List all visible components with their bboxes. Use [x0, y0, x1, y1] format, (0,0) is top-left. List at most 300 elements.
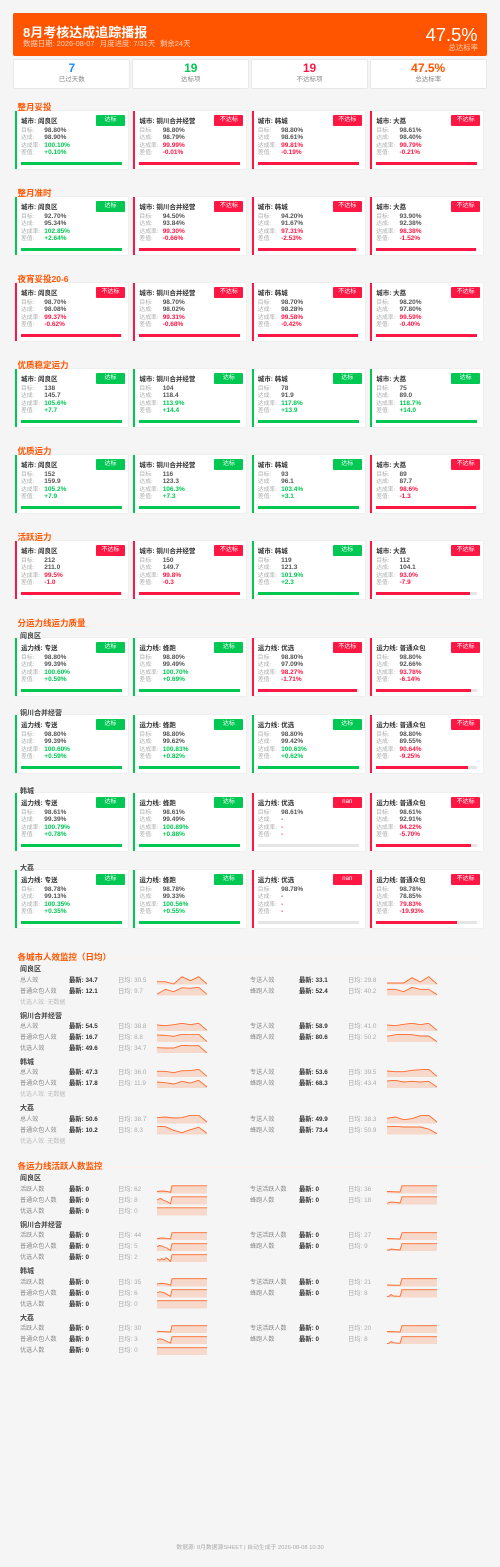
metrics: 差值:	[139, 150, 153, 156]
row: 专送活跃人数	[250, 1231, 440, 1241]
card title: 城市: 大荔	[376, 290, 406, 296]
status badge	[214, 201, 243, 212]
metrics: 101.9%	[281, 572, 303, 579]
subtitle: date and progress	[23, 38, 190, 48]
metrics: 达成率:	[376, 401, 395, 407]
group: 阎良区 人效	[0, 965, 500, 1008]
metrics: 差值:	[139, 677, 153, 683]
metrics: 目标:	[21, 887, 34, 893]
overall rate value: 47.5%	[426, 24, 478, 44]
status badge	[333, 797, 362, 808]
metrics: -0.01%	[163, 149, 183, 156]
metrics: 达成:	[21, 894, 34, 900]
metrics	[21, 213, 70, 242]
metrics	[258, 809, 303, 838]
metrics: 98.70%	[163, 299, 185, 306]
metrics: 98.40%	[399, 134, 422, 141]
metrics	[258, 385, 303, 414]
row: 蜂跑人效	[250, 1033, 440, 1043]
row: 活跃人数: 最新: 0	[69, 1279, 89, 1286]
metrics: 目标:	[258, 300, 271, 306]
KPI: overall rate: 总达标率	[415, 76, 441, 83]
metrics: 94.50%	[163, 213, 185, 220]
row: 总人效: 最新: 47.3	[69, 1069, 98, 1076]
status badge: 不达标	[101, 547, 120, 553]
status badge: 不达标	[457, 203, 475, 209]
status badge: 不达标	[338, 117, 356, 123]
card title: 城市: 大荔	[376, 462, 406, 468]
card: 铜川合并经营 优选	[251, 714, 366, 774]
metrics: -1.3	[399, 493, 411, 500]
card title: 运力线: 专送	[21, 876, 57, 884]
row: 总人效: 日均: 38.8	[118, 1023, 146, 1030]
metrics: 目标:	[376, 300, 389, 306]
metrics: 差值:	[258, 832, 271, 838]
metrics: 99.13%	[44, 893, 66, 900]
status badge: 不达标	[457, 461, 475, 467]
metrics: 98.80%	[281, 654, 303, 661]
metrics: 目标:	[376, 732, 389, 738]
row: 专送活跃人数: 日均: 36	[348, 1186, 371, 1193]
metrics: 差值:	[21, 322, 34, 328]
row: 专送人效	[250, 1068, 440, 1078]
metrics: 目标:	[139, 887, 153, 893]
metrics: 89.0	[399, 392, 412, 399]
metrics: 达成率:	[139, 487, 158, 493]
row: 普通众包人数: 最新: 0	[69, 1336, 89, 1343]
progress bar	[376, 506, 477, 508]
row: 总人效: 总人效	[20, 1116, 38, 1123]
row: 普通众包人数: 最新: 0	[69, 1197, 89, 1204]
group: 韩城 人效	[0, 1058, 500, 1101]
metrics	[376, 127, 422, 156]
row: 活跃人数	[20, 1231, 210, 1241]
row: 专送活跃人数	[250, 1278, 440, 1288]
metrics: 达成:	[21, 221, 34, 227]
status badge: 不达标	[457, 721, 475, 727]
metrics: 100.70%	[163, 669, 188, 676]
metrics: 目标:	[376, 214, 389, 220]
title: 8月考核达成追踪播报	[23, 24, 147, 40]
row: 普通众包人效	[20, 987, 210, 997]
metrics	[139, 731, 188, 760]
metrics: 98.61%	[44, 809, 66, 816]
row: 普通众包人数: 普通众包人数	[20, 1290, 57, 1297]
metrics: 达成率:	[376, 670, 395, 676]
metrics: 98.70%	[281, 299, 303, 306]
row: 普通众包人数	[20, 1289, 210, 1299]
card title: 城市: 阎良区	[21, 548, 57, 554]
metrics: 91.67%	[281, 220, 303, 227]
row: 普通众包人数: 普通众包人数	[20, 1197, 57, 1204]
metrics: 99.39%	[44, 661, 66, 668]
status badge	[451, 642, 480, 653]
metrics: +0.35%	[44, 908, 67, 915]
row: 蜂跑人数: 蜂跑人数	[250, 1290, 274, 1297]
status badge	[214, 373, 243, 384]
card: 整月妥投 阎良区	[14, 110, 129, 170]
metrics: 99.39%	[44, 738, 66, 745]
card: 大荔 优选	[251, 869, 366, 929]
metrics: 目标:	[21, 386, 34, 392]
row: 蜂跑人数: 日均: 9	[348, 1243, 368, 1250]
metrics: 差值:	[139, 580, 153, 586]
card: 整月准时 大荔	[369, 196, 484, 256]
row: 专送人效: 最新: 33.1	[299, 977, 328, 984]
subheading: 阎良区	[20, 1175, 41, 1182]
card: 活跃运力 大荔	[369, 540, 484, 600]
row: 蜂跑人数: 日均: 18	[348, 1197, 371, 1204]
metrics	[21, 809, 70, 838]
row: 活跃人数	[20, 1278, 210, 1288]
progress bar	[139, 689, 240, 692]
subheading: 大荔	[20, 1315, 34, 1322]
row: 普通众包人效: 普通众包人效	[20, 988, 57, 995]
metrics: +2.3	[281, 579, 294, 586]
metrics: 达成:	[376, 307, 389, 313]
metrics: 105.2%	[44, 486, 66, 493]
header banner	[13, 13, 487, 56]
group: 韩城 活跃人数	[0, 1267, 500, 1310]
metrics: 差值:	[376, 754, 389, 760]
status badge: 达标	[460, 375, 472, 381]
metrics	[139, 385, 184, 414]
row: 蜂跑人效: 蜂跑人效	[250, 1080, 274, 1087]
status badge	[96, 373, 125, 384]
subheading: 大荔	[20, 1105, 34, 1112]
card: 优质运力 韩城	[251, 454, 366, 514]
metrics: 达成:	[21, 307, 34, 313]
metrics: 达成:	[139, 739, 153, 745]
card: 铜川合并经营 普通众包	[369, 714, 484, 774]
metrics: 达成率:	[258, 902, 277, 908]
metrics: 98.61%	[399, 127, 422, 134]
metrics: 差值:	[376, 580, 389, 586]
metrics: -0.42%	[281, 321, 302, 328]
metrics: 差值:	[258, 909, 271, 915]
status badge	[214, 874, 243, 885]
metrics: 78.85%	[399, 893, 422, 900]
row: 普通众包人数	[20, 1242, 210, 1252]
metrics: 达成率:	[376, 229, 395, 235]
metrics: -2.53%	[281, 235, 302, 242]
status badge: 不达标	[101, 289, 120, 295]
subheading: 铜川合并经营	[20, 1013, 62, 1020]
status badge	[333, 874, 362, 885]
row: 蜂跑人效	[250, 987, 440, 997]
subheading: 韩城: 韩城	[20, 788, 34, 794]
metrics	[139, 809, 188, 838]
metrics: 98.61%	[281, 134, 303, 141]
card: 夜宵妥投 铜川合并经营	[132, 282, 247, 342]
metrics: -	[281, 901, 283, 908]
card: 优质运力 铜川合并经营	[132, 454, 247, 514]
overall rate label: 总达标率	[448, 43, 478, 52]
card: 韩城 普通众包	[369, 792, 484, 852]
row: 普通众包人效: 普通众包人效	[20, 1034, 57, 1041]
status badge	[333, 115, 362, 126]
row: 活跃人数: 最新: 0	[69, 1232, 89, 1239]
metrics: 达成:	[258, 221, 271, 227]
metrics: 99.81%	[281, 142, 303, 149]
metrics: 差值:	[376, 150, 389, 156]
metrics: 目标:	[376, 386, 389, 392]
metrics: 112	[399, 557, 410, 564]
row: 蜂跑人效: 蜂跑人效	[250, 1034, 274, 1041]
card title: 城市: 阎良区	[21, 204, 57, 210]
metrics: 95.34%	[44, 220, 66, 227]
metrics: -0.3	[163, 579, 174, 586]
progress bar	[139, 592, 240, 594]
metrics: 达成:	[139, 135, 153, 141]
metrics: 113.9%	[163, 400, 184, 407]
metrics: 98.80%	[399, 731, 422, 738]
row: 总人效: 最新: 34.7	[69, 977, 98, 984]
status badge: 达标	[341, 461, 353, 467]
heading: 夜宵妥投20-6: 夜宵妥投20-6	[18, 274, 69, 284]
KPI: elapsed days: 7	[68, 61, 75, 75]
row: 普通众包人数: 日均: 5	[118, 1243, 138, 1250]
metrics: -9.25%	[399, 753, 420, 760]
subheading: 阎良区	[20, 966, 41, 973]
metrics: 106.3%	[163, 486, 185, 493]
subtitle: date and progress: 剩余24天	[160, 38, 190, 48]
status badge: 达标	[104, 375, 116, 381]
status badge	[333, 287, 362, 298]
metrics: 达成:	[376, 135, 389, 141]
card: 活跃运力 阎良区	[14, 540, 129, 600]
metrics: 99.59%	[399, 314, 422, 321]
metrics: 93	[281, 471, 288, 478]
metrics: 达成:	[21, 479, 34, 485]
heading: 各运力线活跃人数监控: 各运力线活跃人数监控	[18, 1161, 103, 1171]
metrics: 达成率:	[21, 487, 40, 493]
row: 普通众包人效: 最新: 17.8	[69, 1080, 98, 1087]
progress bar	[258, 506, 359, 508]
card: 阎良区 普通众包	[369, 637, 484, 697]
metrics: 差值:	[376, 677, 389, 683]
status badge	[333, 373, 362, 384]
status badge	[214, 642, 243, 653]
card: 优质运力 阎良区	[14, 454, 129, 514]
metrics: 159.9	[44, 478, 61, 485]
card title: 城市: 韩城	[258, 118, 288, 124]
status badge: 达标	[104, 644, 116, 650]
metrics: -0.19%	[281, 149, 302, 156]
metrics: 目标:	[258, 214, 271, 220]
metrics: 达成率:	[376, 487, 395, 493]
row: 专送活跃人数: 日均: 27	[348, 1232, 371, 1239]
row: 优选人数: 最新: 0	[69, 1347, 89, 1354]
row: 蜂跑人数: 最新: 0	[299, 1336, 319, 1343]
row: 活跃人数: 活跃人数	[20, 1232, 44, 1239]
metrics: 98.61%	[399, 809, 422, 816]
row: 专送活跃人数: 专送活跃人数	[250, 1325, 287, 1332]
progress bar	[376, 248, 477, 250]
row: 专送人效	[250, 1022, 440, 1032]
progress bar	[139, 248, 240, 250]
progress bar	[376, 592, 477, 594]
progress bar	[21, 162, 122, 164]
metrics	[258, 471, 303, 500]
progress bar	[376, 334, 477, 336]
row: 蜂跑人效: 日均: 40.2	[348, 988, 376, 995]
card: 韩城 优选	[251, 792, 366, 852]
row: 优选人数: 最新: 0	[69, 1301, 89, 1308]
metrics: 达成:	[139, 565, 153, 571]
status badge: 达标	[223, 461, 235, 467]
metrics	[21, 299, 66, 328]
status badge	[96, 545, 125, 556]
card title: 城市: 韩城	[258, 548, 288, 554]
row: 专送人效: 专送人效	[250, 1069, 274, 1076]
progress bar	[258, 766, 359, 768]
row: 优选人效: 优选人效	[20, 1045, 44, 1052]
metrics: 94.22%	[399, 824, 422, 831]
metrics: 达成:	[376, 221, 389, 227]
card title: 运力线: 普通众包	[376, 800, 426, 806]
progress bar	[21, 334, 122, 336]
metrics: 98.27%	[281, 669, 303, 676]
metrics: 98.90%	[44, 134, 66, 141]
status badge: nan	[342, 876, 352, 882]
metrics: 98.80%	[44, 127, 66, 134]
heading: 整月妥投: 整月妥投	[18, 102, 52, 112]
metrics: +14.4	[163, 407, 179, 414]
status badge: 达标	[223, 876, 235, 882]
card title: 城市: 韩城	[258, 204, 288, 210]
progress bar	[139, 162, 240, 164]
status badge: 达标	[341, 721, 353, 727]
metrics: 达成率:	[376, 825, 395, 831]
metrics	[139, 299, 185, 328]
row: 优选人数: 优选人数	[20, 1254, 44, 1261]
metrics: +7.9	[44, 493, 57, 500]
metrics: 211.0	[44, 564, 60, 571]
row: 活跃人数	[20, 1324, 210, 1334]
heading: 优质稳定运力: 优质稳定运力	[18, 360, 69, 370]
metrics: 差值:	[21, 236, 34, 242]
metrics: 达成率:	[258, 825, 277, 831]
metrics: 差值:	[139, 832, 153, 838]
metrics: 差值:	[258, 150, 271, 156]
card title: 运力线: 普通众包	[376, 722, 426, 728]
heading: 整月准时: 整月准时	[18, 188, 52, 198]
group: 铜川合并经营 活跃人数	[0, 1221, 500, 1264]
KPI: failed	[251, 59, 368, 88]
row: 专送人效: 专送人效	[250, 1116, 274, 1123]
row: 活跃人数: 日均: 35	[118, 1279, 141, 1286]
metrics: 目标:	[139, 810, 153, 816]
metrics: 达成:	[376, 565, 389, 571]
metrics: 达成:	[139, 662, 153, 668]
row: 蜂跑人数: 日均: 8	[348, 1336, 368, 1343]
metrics	[376, 886, 466, 916]
metrics: 目标:	[21, 472, 34, 478]
metrics: 98.80%	[281, 731, 303, 738]
status badge: 不达标	[220, 547, 238, 553]
metrics: 达成:	[258, 565, 271, 571]
row: 普通众包人数: 日均: 3	[118, 1336, 138, 1343]
row: 优选人数	[20, 1300, 210, 1310]
metrics: 达成率:	[258, 670, 277, 676]
metrics: 达成率:	[139, 670, 158, 676]
status badge: nan	[342, 799, 352, 805]
metrics	[139, 471, 185, 500]
status badge: 达标	[341, 547, 353, 553]
metrics: 差值:	[139, 322, 153, 328]
row: 专送活跃人数: 最新: 0	[299, 1325, 319, 1332]
status badge: 不达标	[457, 644, 475, 650]
row: 普通众包人效: 日均: 8.3	[118, 1127, 143, 1134]
metrics	[376, 299, 422, 328]
metrics: 98.78%	[44, 886, 66, 893]
metrics: 117.8%	[281, 400, 303, 407]
metrics: 91.9	[281, 392, 294, 399]
metrics: 差值:	[376, 494, 389, 500]
card title: 运力线: 蜂跑	[139, 644, 176, 652]
metrics	[21, 557, 63, 586]
card title: 运力线: 普通众包	[376, 876, 426, 884]
metrics: 99.8%	[163, 572, 181, 579]
metrics: 97.31%	[281, 228, 303, 235]
row: 蜂跑人效: 日均: 43.4	[348, 1080, 376, 1087]
metrics: +0.69%	[163, 676, 185, 683]
metrics	[376, 809, 422, 838]
progress bar	[139, 921, 240, 924]
metrics	[21, 127, 70, 156]
status badge	[451, 459, 480, 470]
subheading: 阎良区: 阎良区	[20, 633, 41, 640]
KPI: overall rate	[370, 59, 487, 88]
row: 专送活跃人数: 专送活跃人数	[250, 1279, 287, 1286]
progress bar	[21, 844, 122, 846]
metrics: -0.66%	[163, 235, 183, 242]
metrics: 达成率:	[21, 825, 40, 831]
metrics: 达成:	[376, 662, 389, 668]
metrics	[376, 557, 418, 586]
progress bar	[258, 844, 359, 846]
group: 铜川合并经营 人效	[0, 1012, 500, 1055]
progress bar	[21, 420, 122, 422]
status badge: 达标	[104, 203, 116, 209]
metrics: 98.78%	[281, 886, 303, 893]
status badge	[214, 797, 243, 808]
card title: 运力线: 专送	[21, 644, 57, 652]
status badge	[333, 459, 362, 470]
metrics: 98.80%	[163, 127, 185, 134]
metrics: 达成:	[21, 739, 34, 745]
metrics	[376, 731, 422, 760]
metrics: 达成:	[258, 393, 271, 399]
progress bar	[258, 334, 359, 336]
metrics: 差值:	[258, 677, 271, 683]
card title: 运力线: 优选	[258, 876, 294, 884]
status badge	[451, 201, 480, 212]
metrics: 达成:	[139, 393, 153, 399]
metrics: 差值:	[21, 832, 34, 838]
row: 总人效: 总人效	[20, 977, 38, 984]
metrics: 98.79%	[163, 134, 185, 141]
progress bar	[258, 420, 359, 422]
metrics: 99.33%	[163, 893, 185, 900]
metrics: 达成率:	[21, 573, 40, 579]
metrics: 100.60%	[44, 669, 70, 676]
metrics: 93.78%	[399, 669, 422, 676]
status badge	[451, 874, 480, 885]
card title: 城市: 阎良区	[21, 118, 57, 124]
metrics: 达成:	[258, 739, 271, 745]
